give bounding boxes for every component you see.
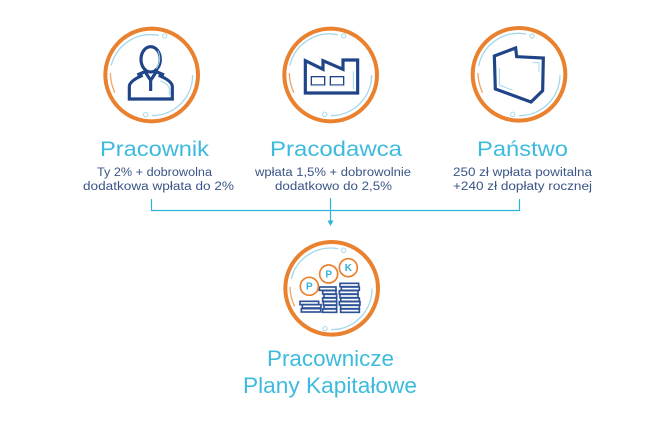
- heading: Pracodawca: Pracodawca: [270, 138, 402, 161]
- text: employee contribution: [83, 167, 234, 193]
- text: employer contribution: dodatkowo do 2,5%: [275, 181, 392, 193]
- text: employer contribution: wpłata 1,5% + dobrowolnie: [254, 167, 411, 179]
- coin K: K: [345, 263, 353, 274]
- icon: PPK coins: [285, 242, 378, 335]
- text: state contribution: 250 zł wpłata powitalna: [453, 167, 593, 179]
- icon: employee: [105, 29, 198, 121]
- text: state contribution: +240 zł dopłaty rocznej: [453, 181, 592, 193]
- coin stacks: [300, 283, 360, 312]
- icon: Poland map: [473, 28, 565, 121]
- icon: factory: [284, 29, 377, 121]
- heading: Pracownik: Pracownik: [100, 138, 210, 161]
- arrow: contributions flow into PPK: [152, 198, 520, 226]
- coin P: P: [306, 282, 313, 293]
- title: Pracownicze Plany Kapitałowe: Pracownicze: [267, 346, 394, 371]
- coin P: P: [325, 269, 332, 280]
- heading: Państwo: Państwo: [477, 138, 568, 161]
- text: state contribution: [453, 167, 593, 193]
- text: employee contribution: Ty 2% + dobrowolna: [97, 167, 213, 179]
- text: employer contribution: [254, 167, 411, 193]
- text: employee contribution: dodatkowa wpłata do 2%: [83, 181, 234, 193]
- title: Pracownicze Plany Kapitałowe: Plany Kapitałowe: [243, 373, 417, 398]
- title: Pracownicze Plany Kapitałowe: [243, 346, 417, 398]
